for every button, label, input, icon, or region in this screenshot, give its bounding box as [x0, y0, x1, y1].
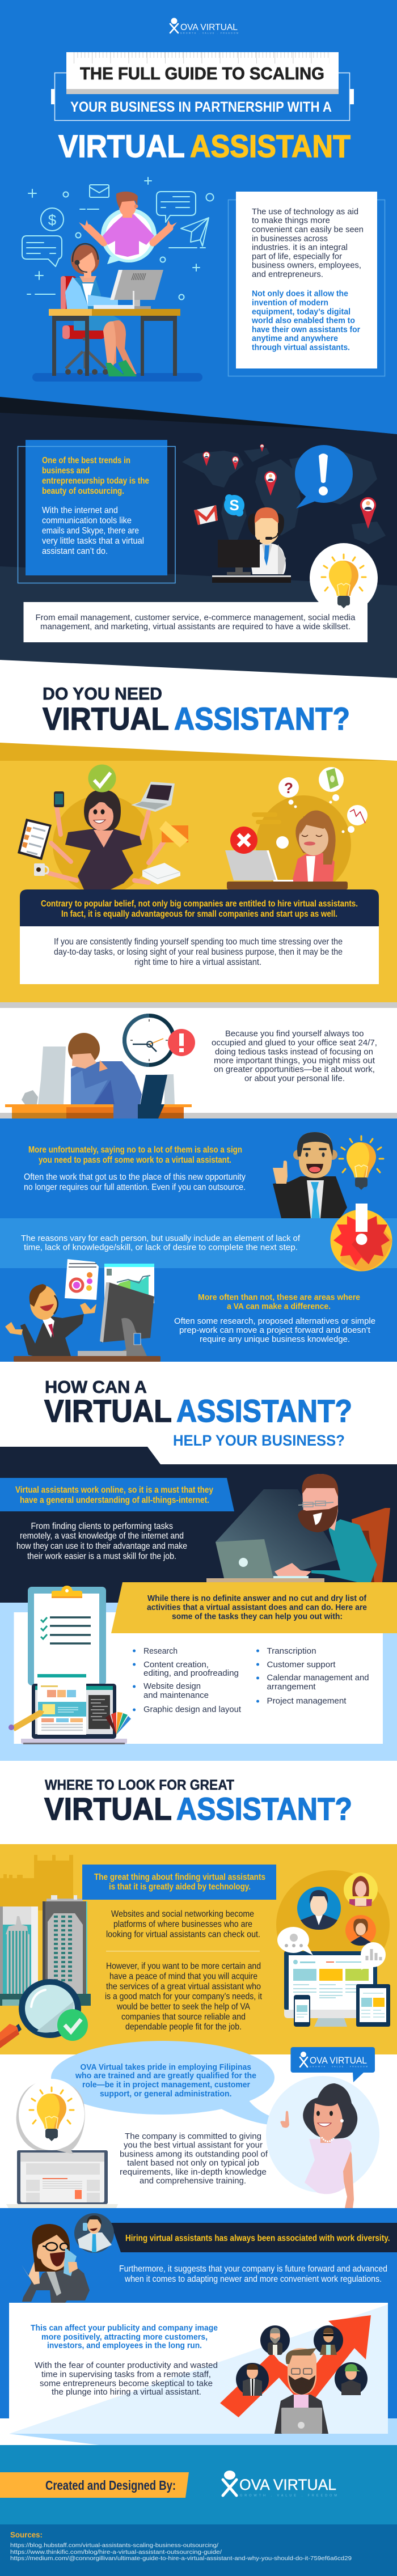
- outsourcing body: communication tools like: [42, 516, 132, 526]
- text: VA can make a difference: More often than not, these are areas where: [198, 1293, 360, 1302]
- intro highlight: invention of modern: [252, 298, 328, 307]
- belief body: [54, 937, 343, 967]
- callout: OVA Virtual takes pride: role—be it in project management, customer: [82, 2081, 250, 2090]
- section background: white heading: [0, 1362, 397, 1452]
- intro paragraph: and entrepreneurs.: [252, 270, 323, 279]
- text: websites and social networking: looking for virtual assistants can check out.: [106, 1930, 260, 1939]
- list left column: Research: [143, 1647, 178, 1656]
- illustration: people and devices: [276, 1870, 390, 2027]
- text: occupied: [212, 1029, 377, 1083]
- illustration: call agent: [212, 507, 291, 583]
- heading: where to look: ASSISTANT?: [176, 1791, 352, 1827]
- skillset text: management, and marketing, virtual assistants are required to have a wide skillset.: [40, 622, 350, 632]
- list left column: and maintenance: [143, 1691, 209, 1700]
- text: virtual assistants online: Virtual assistants work online, so it is a must that they: [15, 1485, 213, 1495]
- text: company committed: The company is committed to giving: [125, 2132, 261, 2141]
- skillset text: From email management, customer service, e-commerce management, social media: [35, 613, 356, 622]
- logo: OVA Virtual top: [170, 18, 238, 34]
- panel: great thing about VAs: The great thing about finding virtual assistants: [94, 1872, 265, 1882]
- illustration: overworked man with clock: [5, 1014, 195, 1118]
- laptop: [21, 1678, 127, 1744]
- heading: do you need virtual assistant: ASSISTANT?: [174, 701, 350, 736]
- section background: dark outsourcing: [0, 397, 397, 680]
- intro paragraph: business owners, employees,: [252, 261, 361, 270]
- text: virtual assistants online: [0, 1478, 234, 1561]
- intro highlight: [251, 290, 360, 352]
- banner: [111, 1582, 397, 1633]
- banner: work diversity: [111, 2223, 397, 2252]
- text: occupied: Because you find yourself always too: [225, 1029, 364, 1039]
- icon: exclamation speech bubble: [295, 445, 353, 509]
- text: virtual assistants online: how they can use it to their advantage and make: [16, 1541, 187, 1551]
- badge: OVA Virtual logo: [290, 2047, 375, 2082]
- text: websites and social networking: the services of a great virtual assistant who: [106, 1982, 261, 1992]
- illustration: multitasking woman: [18, 764, 188, 895]
- chart: rising red arrow: [220, 2315, 371, 2417]
- sources: Sources:: [10, 2531, 43, 2539]
- text: reasons vary: The reasons vary for each person, but usually include an element of lack of: [21, 1234, 301, 1243]
- outsourcing body: With the internet and: [42, 506, 118, 515]
- list right column: Calendar management and: [267, 1673, 369, 1683]
- badge: OVA Virtual logo: GROWTH . VALUE . FREEDOM: [310, 2066, 368, 2068]
- illustration: man in speech bubble: [79, 192, 177, 264]
- panel: great thing about VAs: [82, 1865, 276, 1900]
- text: virtual assistants online: remotely, a vast knowledge of the internet and: [20, 1531, 184, 1541]
- section background: white heading then yellow: [0, 1761, 397, 2054]
- intro highlight: world also enabled them to: [251, 316, 355, 325]
- text: virtual assistants online: have a general understanding of all-things-internet.: [20, 1495, 209, 1505]
- sources: [10, 2531, 352, 2562]
- icon: clock: [123, 1014, 176, 1067]
- title block with ruler: [51, 52, 354, 164]
- tablet: [356, 1984, 390, 2027]
- text: websites and social networking: [105, 1909, 262, 2032]
- list left column: Graphic design and layout: [143, 1705, 241, 1714]
- chat bubbles: [277, 1927, 386, 1970]
- portrait: man: [297, 1887, 341, 1930]
- panel: outsourcing text: [18, 440, 175, 583]
- text: virtual assistants online: their work easier is a must skill for the job.: [27, 1552, 176, 1561]
- outsourcing highlight: One of the best trends in: [42, 456, 130, 465]
- heading: how can a virtual assistant: HOW CAN A: [45, 1377, 147, 1397]
- section background: work diversity: [0, 2208, 397, 2445]
- sources: https://blog.hubstaff.com/virtual-assistants-scaling-business-outsourcing/: [10, 2542, 218, 2549]
- icon: red x: [230, 827, 257, 854]
- illustration: woman on phone: [22, 2224, 90, 2303]
- outsourcing highlight: entrepreneurship today is the: [42, 476, 149, 486]
- colour swatches: [105, 1712, 131, 1735]
- icon: envelope: [159, 821, 188, 848]
- text: VA can make a difference: prep-work can move a project forward and doesn’t: [179, 1326, 370, 1335]
- text: VA can make a difference: Often some research, proposed alternatives or simple: [174, 1317, 375, 1326]
- phone: [294, 1995, 310, 2027]
- thought bubbles: [276, 767, 368, 849]
- outsourcing highlight: [42, 456, 149, 496]
- illustration: bearded man with laptop: [274, 2348, 328, 2434]
- publicity highlight: more positively, attracting more customers,: [41, 2333, 208, 2342]
- intro paragraph: to make things more: [252, 217, 330, 226]
- label: created and designed by: [0, 2472, 189, 2498]
- text: reasons vary: [21, 1234, 301, 1252]
- heading: do you need virtual assistant: VIRTUAL: [43, 701, 169, 736]
- logo: OVA Virtual footer: [223, 2471, 337, 2498]
- section background: hero blue: [0, 0, 397, 437]
- belief body: right time to hire a virtual assistant.: [134, 957, 261, 967]
- heading: where to look: [44, 1777, 352, 1827]
- heading: how can a virtual assistant: VIRTUAL: [44, 1393, 172, 1429]
- icon: gmail: [194, 505, 218, 525]
- badge: OVA Virtual logo: OVA VIRTUAL: [310, 2056, 367, 2066]
- outsourcing body: very little tasks that a virtual: [42, 536, 144, 546]
- intro highlight: equipment, today’s digital: [252, 307, 350, 316]
- text: company committed: you the best virtual assistant for your: [124, 2141, 263, 2150]
- illustration: world map with pins: [182, 444, 386, 548]
- text: websites and social networking: have a peace of mind that you will acquire: [109, 1972, 257, 1981]
- list left column: Content creation,: [143, 1660, 209, 1670]
- intro paragraph: industries. it is an integral: [252, 243, 348, 252]
- heading: how can a virtual assistant: [44, 1377, 352, 1449]
- document: [65, 1259, 99, 1300]
- panel: contrary to popular belief: [20, 889, 379, 984]
- text: company committed: business among its outstanding pool of: [120, 2150, 268, 2159]
- icon: laptop: [131, 782, 175, 812]
- text: reasons vary: time, lack of knowledge/skill, or lack of desire to complete the next step.: [24, 1243, 298, 1252]
- heading: how can a virtual assistant: HELP YOUR BUSINESS?: [173, 1432, 345, 1449]
- intro highlight: anytime and anywhere: [252, 334, 338, 344]
- logo: OVA Virtual top: OVA VIRTUAL: [180, 23, 238, 32]
- text: websites and social networking: platforms of where businesses who are: [113, 1920, 252, 1929]
- avatars: [236, 2325, 368, 2396]
- text: occupied: doing tedious tasks instead of focusing on: [215, 1048, 373, 1057]
- illustration: floating line icons: $: [48, 211, 57, 228]
- belief highlight: In fact, it is equally advantageous for small companies and start ups as well.: [61, 909, 337, 919]
- panel: intro text: [228, 192, 385, 376]
- title line 3: [58, 128, 350, 164]
- icon: skype: S: [229, 497, 239, 514]
- section background: dark internet: [0, 1447, 397, 1761]
- text: furthermore: [119, 2264, 387, 2284]
- publicity highlight: This can affect your publicity and company image: [31, 2324, 218, 2333]
- intro highlight: Not only does it allow the: [252, 290, 348, 299]
- publicity highlight: investors, and employees in the long run.: [47, 2341, 202, 2350]
- illustration: bearded man on laptop: [206, 1474, 390, 1583]
- illustration: woman pointing: [266, 2076, 379, 2208]
- icon: caller in circle: [74, 2213, 114, 2253]
- intro paragraph: [252, 207, 364, 279]
- belief body: If you are consistently finding yourself spending too much time stressing over the: [54, 937, 343, 947]
- list left column: editing, and proofreading: [143, 1669, 239, 1678]
- intro paragraph: The use of technology as aid: [252, 207, 358, 217]
- text: VA can make a difference: a VA can make a difference.: [227, 1302, 331, 1311]
- intro paragraph: convenient can easily be seen: [252, 226, 364, 235]
- heading: where to look: VIRTUAL: [44, 1791, 172, 1827]
- list right column: Transcription: [267, 1647, 316, 1656]
- section background: white company: [0, 2054, 397, 2208]
- icon: phone: [54, 791, 64, 807]
- text: VA can make a difference: [174, 1293, 375, 1344]
- text: occupied: more important things, you might miss out: [214, 1057, 375, 1066]
- text: virtual assistants online: From finding clients to performing tasks: [31, 1522, 173, 1531]
- heading: do you need virtual assistant: [43, 684, 350, 736]
- icon: green check: [88, 764, 116, 793]
- illustration: floating line icons: [22, 177, 213, 299]
- icon: skype: [224, 494, 244, 516]
- panel: publicity: [9, 2303, 388, 2434]
- panel: skillset callout with light bulb: [24, 543, 378, 642]
- text: websites and social networking: dependable people fit for the job.: [125, 2022, 242, 2032]
- callout: OVA Virtual takes pride: who are trained and are greatly qualified for the: [75, 2071, 256, 2081]
- illustration: city skyline and magnifier: [0, 1855, 91, 2048]
- banner: some of the tasks they can help you out with:: [172, 1612, 343, 1621]
- belief body: day-to-day tasks, or losing sight of your real business purpose, then it may be the: [54, 947, 343, 957]
- heading: how can a virtual assistant: ASSISTANT?: [176, 1393, 352, 1429]
- publicity body: the plunge into hiring a virtual assistant.: [52, 2388, 201, 2397]
- panel: tasks list: [14, 1582, 397, 1744]
- logo: OVA Virtual footer: GROWTH . VALUE . FREEDOM: [240, 2494, 337, 2498]
- skillset text: [35, 613, 356, 632]
- icon: starburst alert: [330, 1204, 392, 1271]
- publicity body: With the fear of counter productivity and wasted: [35, 2361, 218, 2370]
- belief highlight: [41, 899, 358, 919]
- text: websites and social networking: would be better to seek the help of VA: [116, 2002, 250, 2011]
- publicity highlight: [31, 2324, 218, 2350]
- section background: occupied: [0, 1002, 397, 1118]
- title line 1: THE FULL GUIDE TO SCALING: [80, 63, 324, 83]
- heading: do you need virtual assistant: DO YOU NEED: [43, 684, 162, 704]
- list right column: Customer support: [267, 1660, 336, 1670]
- outsourcing highlight: beauty of outsourcing.: [42, 486, 124, 496]
- label: created and designed by: Created and Designed By:: [45, 2478, 176, 2493]
- intro paragraph: in businesses across: [252, 234, 328, 243]
- icon: alert: [168, 1029, 195, 1056]
- text: websites and social networking: companies that source reliable and: [121, 2012, 246, 2022]
- text: saying no: [24, 1145, 246, 1192]
- panel: great thing about VAs: is that it is greatly aided by technology.: [109, 1882, 251, 1892]
- callout: OVA Virtual takes pride: [51, 2041, 301, 2126]
- text: saying no: More unfortunately, saying no to a lot of them is also a sign: [28, 1145, 242, 1155]
- pencil: [9, 1710, 44, 1731]
- title line 2: YOUR BUSINESS IN PARTNERSHIP WITH A: [70, 99, 332, 115]
- sources: https://medium.com/@connorgillivan/ultimate-guide-to-hire-a-virtual-assistant-and-why-you-should-do-it-759ef6a6cd29: [10, 2555, 352, 2562]
- banner: activities that a virtual assistant does and can do. Here are: [147, 1603, 367, 1612]
- text: saying no: no longer requires our full attention. Even if you can outsource.: [24, 1183, 246, 1192]
- icon: mug: [34, 863, 48, 876]
- list right column: arrangement: [267, 1683, 315, 1692]
- chart: [104, 1264, 154, 1303]
- intro paragraph: part of life, especially for: [252, 252, 342, 261]
- text: occupied: or about your personal life.: [244, 1074, 345, 1083]
- intro highlight: through virtual assistants.: [252, 343, 350, 352]
- illustration: stressed woman: [225, 767, 368, 894]
- text: saying no: Often the work that got us to the place of this new opportunity: [24, 1172, 246, 1182]
- illustration: man with idea: [273, 1132, 383, 1218]
- publicity body: [35, 2361, 218, 2397]
- text: company committed: talent based not only on typical job: [127, 2159, 259, 2168]
- publicity body: some entrepreneurs become skeptical to take: [40, 2379, 213, 2388]
- icon: clipboard: [18, 819, 52, 860]
- logo: OVA Virtual top: GROWTH . VALUE . FREEDOM: [180, 32, 238, 34]
- sources: https://www.thinkific.com/blog/hire-a-virtual-assistant-outsourcing-guide/: [10, 2549, 222, 2556]
- intro highlight: have their own assistants for: [252, 325, 360, 334]
- portrait: woman yellow: [344, 1872, 378, 1906]
- magnifier: [0, 1979, 88, 2048]
- text: company committed: and comprehensive training.: [140, 2177, 246, 2186]
- callout: OVA Virtual takes pride: OVA Virtual takes pride in employing Filipinas: [81, 2063, 251, 2072]
- list right column: [256, 1647, 369, 1706]
- list left column: [133, 1647, 241, 1714]
- text: occupied: occupied and glued to your office seat 24/7,: [212, 1039, 377, 1048]
- callout: OVA Virtual takes pride: support, or general administration.: [100, 2090, 231, 2099]
- illustration: clipboard and laptop: [9, 1586, 131, 1744]
- text: company committed: requirements, like in-depth knowledge: [120, 2168, 267, 2177]
- list left column: Website design: [143, 1682, 201, 1691]
- text: saying no: you need to pass off some work to a virtual assistant.: [39, 1155, 231, 1165]
- title line 3: VIRTUAL: [58, 128, 185, 164]
- icon: paper stack: [142, 863, 180, 884]
- monitor: [284, 1951, 377, 2027]
- publicity body: time in supervising tasks from a remote staff,: [41, 2370, 211, 2379]
- outsourcing body: assistant can’t do.: [42, 546, 108, 556]
- logo: OVA Virtual footer: OVA VIRTUAL: [239, 2476, 336, 2493]
- section background: white heading and yellow band: [0, 660, 397, 1002]
- portrait: woman orange: [345, 1915, 376, 1946]
- text: websites and social networking: However, if you want to be more certain and: [106, 1961, 261, 1971]
- title line 3: ASSISTANT: [190, 128, 350, 164]
- text: occupied: on greater opportunities—be it about work,: [214, 1065, 375, 1074]
- outsourcing body: [42, 506, 144, 556]
- text: company committed: [120, 2132, 268, 2186]
- illustration: man at computer: [5, 1259, 161, 1362]
- outsourcing highlight: business and: [42, 466, 90, 476]
- list right column: Project management: [267, 1697, 346, 1706]
- section background: footer: [0, 2445, 397, 2576]
- outsourcing body: emails and Skype, there are: [42, 526, 139, 536]
- section background: blue: [0, 1118, 397, 1362]
- banner: While there is no definite answer and no cut and dry list of: [147, 1594, 366, 1603]
- heading: where to look: WHERE TO LOOK FOR GREAT: [45, 1777, 234, 1793]
- text: websites and social networking: is a good match for your company’s needs, it: [105, 1992, 262, 2001]
- text: VA can make a difference: require any unique business knowledge.: [200, 1335, 350, 1344]
- text: websites and social networking: Websites and social networking become: [111, 1909, 254, 1919]
- building right: [43, 1895, 87, 1995]
- illustration: woman at desk with headset: [32, 244, 202, 382]
- illustration: laptop with light bulb: [6, 2079, 118, 2208]
- building left: [0, 1906, 38, 1994]
- thought bubbles: ?: [284, 779, 293, 796]
